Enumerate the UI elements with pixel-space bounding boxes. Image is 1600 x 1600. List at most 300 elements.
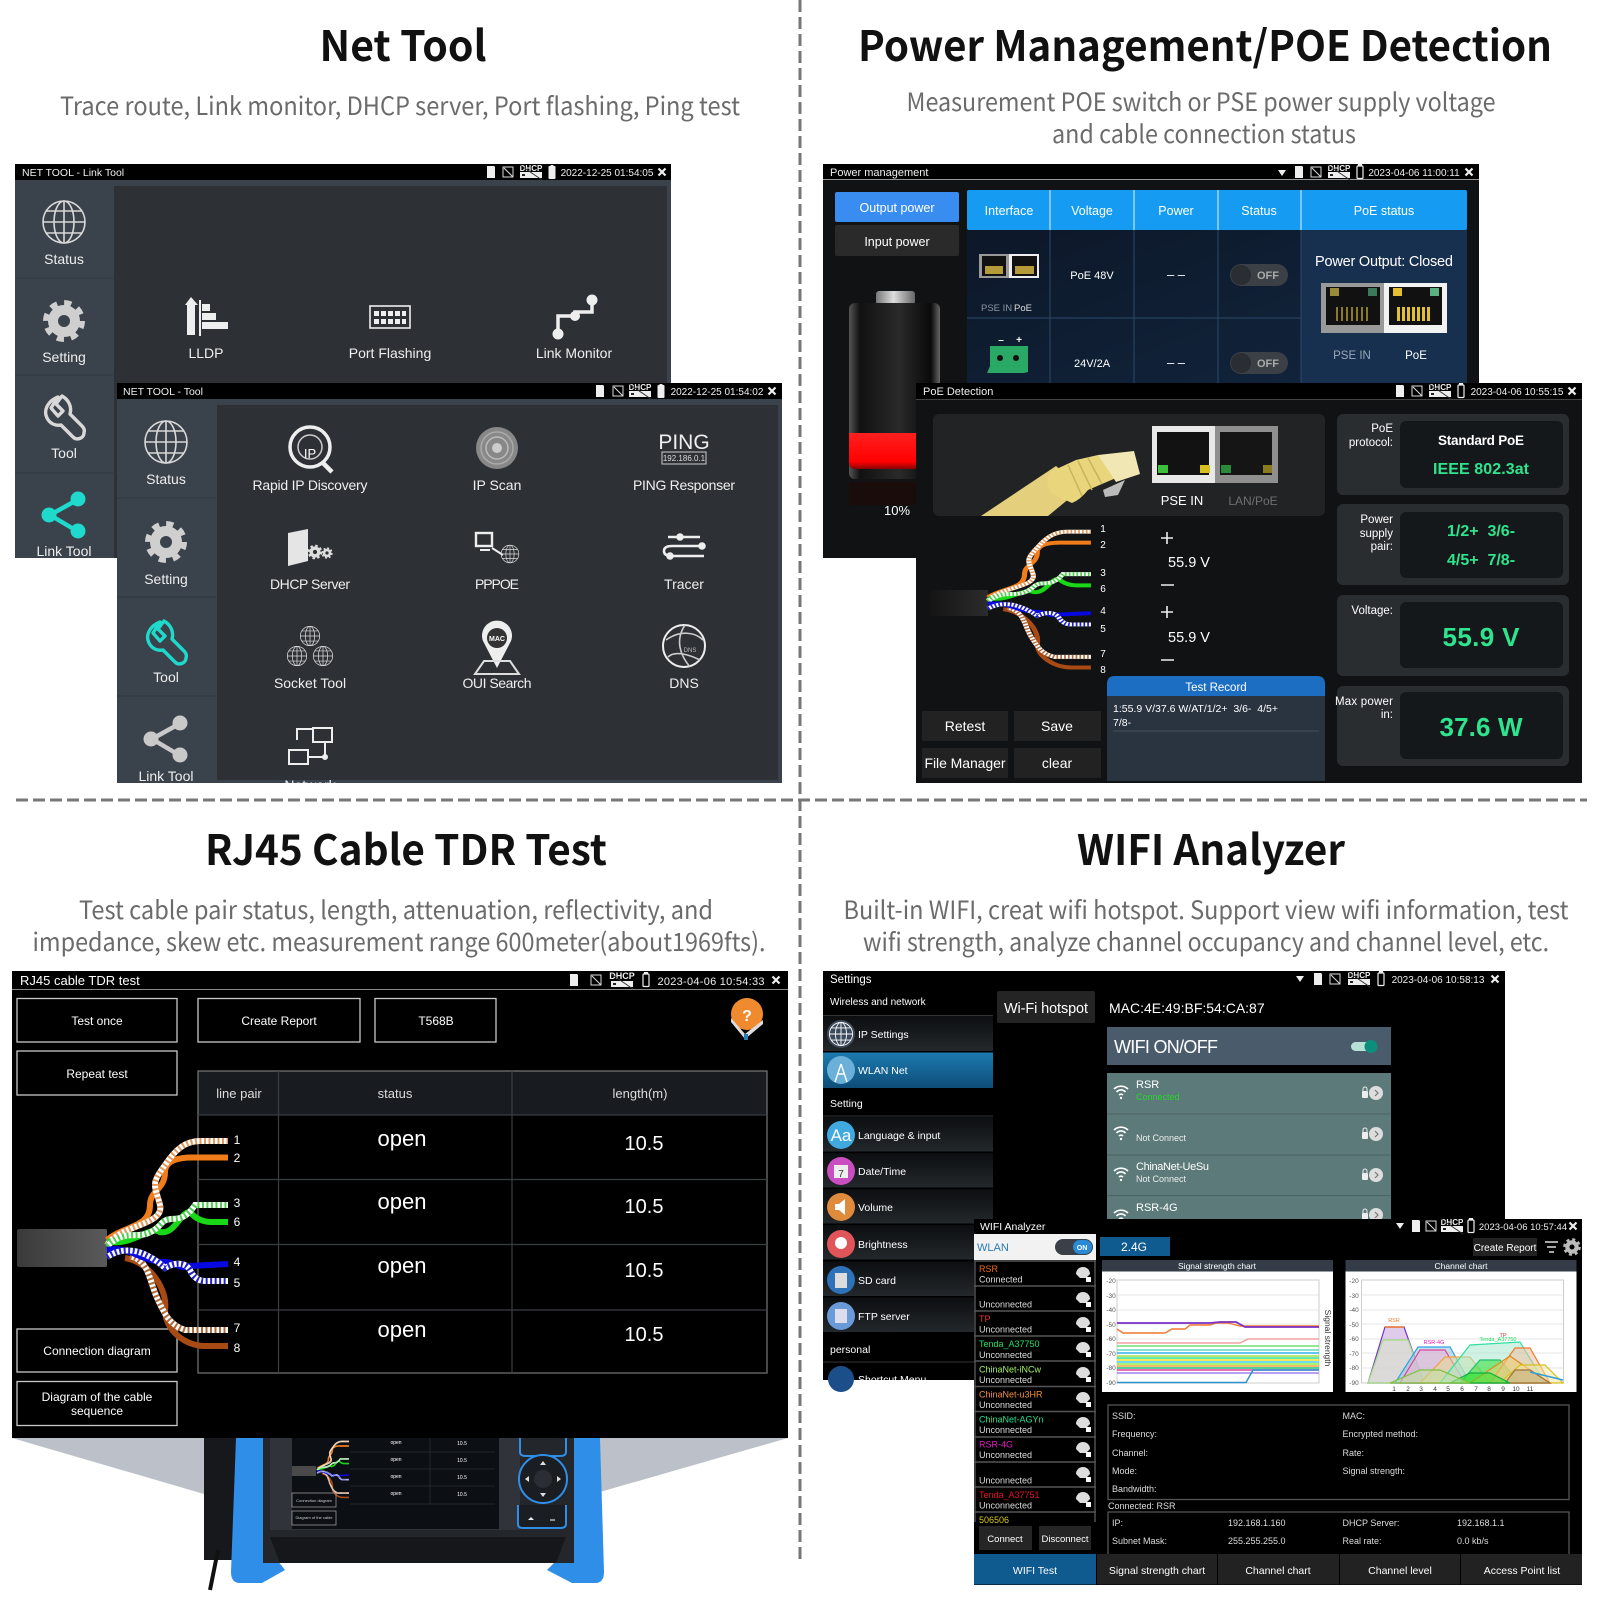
subtitle: WIFI Analyzer: Built-in WIFI, creat wifi hotspot. Support view wifi information, test	[844, 891, 1569, 927]
icon: Socket Tool: Socket Tool	[274, 675, 346, 691]
subtitle: RJ45 Cable TDR Test	[32, 891, 766, 959]
info box: connected network: 255.255.255.0	[1228, 1536, 1286, 1546]
info box: connected network: IP:	[1112, 1518, 1123, 1528]
menu: Date/Time: Date/Time	[858, 1166, 906, 1178]
icon: PING Responser	[633, 431, 735, 493]
chart: Channel: 9	[1501, 1386, 1505, 1393]
panel: NET TOOL Link Tool screen: NET TOOL - Link Tool	[22, 167, 124, 179]
settings menu: personal	[830, 1344, 870, 1356]
bottom tabs: Signal strength chart	[1109, 1565, 1205, 1577]
wifi access point list: Unconnected	[979, 1425, 1032, 1435]
wifi access point list: Connected	[979, 1274, 1023, 1284]
panel: Power management screen: Power management	[830, 167, 928, 179]
icon: PING Responser: 192.186.0.1	[663, 454, 706, 463]
sidebar: Setting	[42, 303, 86, 365]
label cut off at panel bottom: Network	[284, 777, 337, 793]
sidebar: Status	[43, 201, 85, 267]
readout: Voltage	[1337, 595, 1569, 676]
readout: PoE protocol: protocol:	[1349, 437, 1393, 449]
voltage readings per pair: 55.9 V	[1168, 630, 1210, 646]
info box: connected network: Subnet Mask:	[1112, 1536, 1167, 1546]
menu: Shortcut Menu	[828, 1366, 926, 1392]
icon: OUI Search: MAC	[489, 636, 505, 643]
bar: WIFI ON/OFF: WIFI ON/OFF	[1114, 1037, 1218, 1057]
MAC address: MAC:4E:49:BF:54:CA:87	[1109, 1000, 1265, 1016]
icon: help book	[731, 998, 763, 1040]
icon: Port Flashing	[349, 306, 431, 361]
buttons: Retest Save File Manager clear: Retest	[945, 718, 985, 734]
subtitle: Power Management	[906, 83, 1496, 151]
table: power interfaces: Power	[1158, 204, 1194, 218]
icon: DNS: DNS	[684, 648, 696, 654]
bar: WLAN switch	[974, 1234, 1096, 1260]
chart: Channel: RSR	[1388, 1318, 1400, 1324]
chart: Channel: -30	[1349, 1293, 1359, 1300]
diagram: PoE wires: 8	[1100, 665, 1106, 676]
icon: large RJ45 ports	[1321, 283, 1447, 333]
menu: Date/Time	[827, 1157, 906, 1185]
diagram: PoE wires: 5	[1100, 624, 1106, 635]
wifi network list	[1107, 1073, 1391, 1223]
settings menu: Setting	[830, 1098, 863, 1110]
buttons: Create Report	[241, 1014, 317, 1028]
status bar: 2023-04-06 10:55:15	[1471, 387, 1564, 398]
panel: Test Record: Test Record	[1185, 682, 1247, 694]
panel: WIFI Analyzer screen: WIFI Analyzer	[980, 1221, 1046, 1233]
table: power interfaces: Status	[1241, 204, 1277, 218]
button: 2.4G	[1100, 1237, 1170, 1256]
menu: WLAN Net	[827, 1056, 908, 1084]
chart: Channel: Channel chart	[1435, 1261, 1488, 1271]
chart: Channel	[1346, 1260, 1576, 1393]
info box: selected network: Frequency:	[1112, 1429, 1157, 1439]
panel: Settings WLAN screen: Settings	[830, 974, 872, 986]
chart: Channel: 2	[1406, 1386, 1410, 1393]
diagram: cable wires: 7	[234, 1321, 241, 1335]
menu: Date/Time: 7	[838, 1169, 844, 1180]
info box: connected network: 192.168.1.160	[1228, 1518, 1286, 1528]
bar: WLAN switch: WLAN	[977, 1242, 1009, 1254]
buttons: Retest Save File Manager clear: Save	[1041, 718, 1073, 734]
chart: Channel: 1	[1392, 1386, 1396, 1393]
chart: Channel: 8	[1487, 1386, 1491, 1393]
table: power interfaces: PoE	[1014, 303, 1032, 314]
table: power interfaces: Interface	[985, 204, 1033, 218]
readout: Power supply pair: pair:	[1371, 541, 1393, 553]
diagram: PoE wires: 4	[1100, 606, 1106, 617]
status bar: DHCP	[609, 971, 635, 981]
panel: Test Record	[1107, 676, 1325, 781]
info box: selected network: Bandwidth:	[1112, 1484, 1157, 1494]
subtitle: WIFI Analyzer: wifi strength, analyze channel occupancy and channel level, etc.	[863, 923, 1549, 959]
info box: selected network: Rate:	[1342, 1448, 1364, 1458]
sidebar: Tool: Tool	[153, 669, 179, 685]
table: TDR results: open	[378, 1317, 426, 1342]
chart: Channel: Tenda_A37750	[1479, 1337, 1517, 1343]
buttons: Connection diagram	[43, 1344, 151, 1358]
sidebar: Link Tool	[36, 492, 92, 559]
diagram: PoE wires: 6	[1100, 584, 1106, 595]
chart: Channel: -60	[1349, 1336, 1359, 1343]
wifi network list: Not Connect	[1136, 1133, 1187, 1143]
wifi network list: Not Connect	[1136, 1174, 1187, 1184]
chart: Signal strength: Signal strength	[1323, 1310, 1333, 1367]
panel: NET TOOL Tool screen	[117, 383, 782, 793]
buttons: Connect Disconnect: Disconnect	[1042, 1534, 1089, 1545]
menu: Shortcut Menu: Shortcut Menu	[858, 1374, 926, 1386]
info box: connected network: 0.0 kb/s	[1457, 1536, 1489, 1546]
panel: NET TOOL Tool screen: NET TOOL - Tool	[123, 386, 203, 398]
bottom tabs: Channel level	[1368, 1565, 1432, 1577]
wifi access point list: Unconnected	[979, 1325, 1032, 1335]
menu: Language and input: Aa	[831, 1126, 852, 1145]
icon: OUI Search: OUI Search	[462, 675, 532, 691]
mini screen content: 10.5	[457, 1441, 467, 1447]
voltage readings per pair: 55.9 V	[1168, 555, 1210, 571]
menu: Volume	[827, 1193, 893, 1221]
bottom tabs: Access Point list	[1484, 1565, 1560, 1577]
icon: DHCP Server	[270, 529, 350, 592]
icon: Rapid IP Discovery	[252, 427, 368, 493]
tester device photo	[12, 1438, 788, 1590]
mini screen content: 10.5	[457, 1458, 467, 1464]
wifi network list: Connected	[1136, 1092, 1180, 1102]
chart: Channel: -70	[1349, 1351, 1359, 1358]
status bar: 2023-04-06 11:00:11	[1368, 168, 1460, 179]
info box: selected network: Channel:	[1112, 1448, 1148, 1458]
diagram: PoE wires: 1	[1100, 524, 1106, 535]
icon: IP Scan: IP Scan	[473, 477, 521, 493]
status bar: DHCP	[1348, 971, 1371, 980]
readout: Max power in: Max power	[1335, 696, 1393, 708]
icon: LLDP: LLDP	[188, 345, 224, 361]
readout: Power supply pair: 4/5+ 7/8-	[1447, 552, 1515, 569]
wifi access point list: Tenda_A37751	[979, 1490, 1040, 1500]
diagram: PoE wires: 3	[1100, 568, 1106, 579]
icon: settings gear	[1564, 1239, 1580, 1255]
icon: Tracer: Tracer	[664, 576, 704, 592]
wifi access point list: Unconnected	[979, 1500, 1032, 1510]
wifi access point list: Unconnected	[979, 1475, 1032, 1485]
table: TDR results	[198, 1071, 767, 1373]
panel: Test Record: 7/8-	[1113, 717, 1132, 729]
title: Power Management/POE Detection: Power Management/POE Detection	[858, 13, 1552, 74]
icon: IP Scan	[473, 427, 521, 493]
illustration: cable and PSE ports: PSE IN	[1161, 493, 1203, 508]
subtitle: Net Tool: Trace route, Link monitor, DHCP server, Port flashing, Ping test	[60, 87, 741, 123]
table: TDR results: open	[378, 1189, 426, 1214]
white mask below panel	[100, 783, 790, 797]
panel: RJ45 cable TDR test screen: RJ45 cable TDR test	[20, 973, 140, 988]
status bar	[1396, 383, 1576, 399]
subtitle: Power Management: and cable connection status	[1052, 115, 1356, 151]
readout: PoE protocol: PoE	[1371, 423, 1393, 435]
readout: PoE protocol	[1337, 414, 1569, 495]
icon: LLDP	[185, 297, 228, 361]
wifi access point list: TP	[979, 1314, 991, 1324]
toggle: OFF	[1230, 352, 1288, 374]
readout: Power supply pair: supply	[1360, 528, 1393, 540]
bar: WIFI ON/OFF	[1107, 1027, 1391, 1065]
wifi access point list: Unconnected	[979, 1375, 1032, 1385]
wifi access point list: Tenda_A37750	[979, 1339, 1040, 1349]
settings menu: Wireless and network	[830, 997, 927, 1008]
info box: selected network: SSID:	[1112, 1411, 1136, 1421]
readout: Voltage: Voltage:	[1351, 605, 1393, 617]
icon: DHCP Server: DHCP Server	[270, 576, 350, 592]
subtitle: RJ45 Cable TDR Test: impedance, skew etc. measurement range 600meter(about1969fts).	[32, 923, 766, 959]
table: power interfaces: PSE IN	[981, 303, 1012, 314]
wifi access point list: Unconnected	[979, 1350, 1032, 1360]
button: Create Report	[1473, 1238, 1537, 1256]
chart: Channel: 7	[1474, 1386, 1478, 1393]
status bar: 2023-04-06 10:54:33	[658, 976, 764, 988]
icon: small RJ45 ports	[979, 254, 1039, 278]
icon: Rapid IP Discovery: Rapid IP Discovery	[252, 477, 368, 493]
wifi access point list: ChinaNet-iNCw	[979, 1364, 1042, 1374]
chart: Channel: -80	[1349, 1365, 1359, 1372]
readout: Max power in: in:	[1381, 709, 1393, 721]
wifi access point list: Unconnected	[979, 1400, 1032, 1410]
wifi access point list: ChinaNet-u3HR	[979, 1390, 1043, 1400]
button: Output power: Output power	[859, 201, 935, 215]
readout: Voltage: 55.9 V	[1442, 622, 1520, 652]
status bar: DHCP	[629, 383, 652, 392]
icon: Socket Tool	[274, 626, 346, 691]
tab: Wi-Fi hotspot	[997, 991, 1095, 1023]
icon: Link Monitor: Link Monitor	[536, 345, 612, 361]
table: power interfaces: – –	[1167, 355, 1186, 370]
chart: Channel: RSR-4G	[1424, 1340, 1444, 1346]
buttons: Diagram of the cable	[42, 1390, 153, 1404]
chart: Signal strength: -60	[1106, 1336, 1116, 1343]
status bar	[1296, 971, 1498, 987]
table: TDR results: line pair	[216, 1086, 262, 1101]
title: WIFI Analyzer: WIFI Analyzer	[1077, 817, 1346, 878]
mini screen content	[292, 1438, 495, 1525]
icon: PPPOE: PPPOE	[475, 576, 519, 592]
status bar: 2023-04-06 10:57:44	[1479, 1222, 1567, 1233]
wifi access point list: 506506	[979, 1515, 1009, 1525]
icon: help book: ?	[742, 1008, 752, 1025]
menu: FTP server: FTP server	[858, 1311, 910, 1323]
info box: selected network	[1108, 1405, 1569, 1500]
chart: Channel: 10	[1512, 1386, 1520, 1393]
icon: green terminal connector: –	[998, 335, 1004, 346]
mini screen content: open	[390, 1491, 402, 1497]
info box: selected network: Signal strength:	[1342, 1466, 1405, 1476]
diagram: cable wires: 1	[234, 1133, 241, 1147]
chart: Channel: -20	[1349, 1278, 1359, 1285]
status bar	[596, 383, 776, 399]
wifi access point list: Unconnected	[979, 1450, 1032, 1460]
info box: connected network: 192.168.1.1	[1457, 1518, 1505, 1528]
mini screen content: Diagram of the cable	[296, 1515, 333, 1520]
chart: Signal strength: -20	[1106, 1278, 1116, 1285]
chart: Signal strength: -70	[1106, 1351, 1116, 1358]
diagram: cable wires: 5	[234, 1276, 241, 1290]
status bar: 2023-04-06 10:58:13	[1392, 975, 1485, 986]
diagram: cable wires: 4	[234, 1255, 241, 1269]
sidebar: Setting: Setting	[144, 571, 188, 587]
info box: selected network: MAC:	[1342, 1411, 1365, 1421]
wifi access point list: RSR-4G	[979, 1440, 1013, 1450]
buttons: Retest Save File Manager clear: File Manager	[924, 755, 1006, 771]
chart: Channel: 6	[1460, 1386, 1464, 1393]
readout: Power supply pair: Power	[1360, 514, 1393, 526]
wifi network list: RSR	[1136, 1079, 1159, 1091]
info box: connected network: DHCP Server:	[1342, 1518, 1399, 1528]
dashed divider: horizontal	[16, 798, 1587, 802]
icon: filter	[1545, 1242, 1558, 1252]
panel: PoE Detection screen: PoE Detection	[923, 386, 993, 398]
wifi network list: RSR-4G	[1136, 1202, 1178, 1214]
readout: PoE protocol: Standard PoE	[1438, 433, 1524, 448]
readout: Max power in	[1335, 686, 1569, 766]
table: power interfaces	[967, 190, 1467, 390]
sidebar: Tool: Tool	[51, 445, 77, 461]
table: TDR results: 10.5	[625, 1196, 663, 1218]
buttons: Retest Save File Manager clear: clear	[1042, 755, 1073, 771]
buttons	[17, 998, 496, 1426]
chart: Signal strength: -30	[1106, 1293, 1116, 1300]
wifi access point list: Unconnected	[979, 1300, 1032, 1310]
icon: green terminal connector: +	[1016, 335, 1022, 346]
info box: connected network	[1108, 1501, 1569, 1554]
chart: Signal strength: -80	[1106, 1365, 1116, 1372]
settings menu	[823, 997, 993, 1392]
diagram: PoE wires	[930, 524, 1106, 676]
icon: Tracer	[664, 534, 704, 592]
table: TDR results: status	[378, 1086, 413, 1101]
info box: selected network: Encrypted method:	[1342, 1429, 1418, 1439]
icon: PING Responser: PING	[658, 431, 710, 454]
icon: OUI Search	[462, 621, 532, 691]
status bar	[487, 164, 666, 180]
title: Net Tool: Net Tool	[320, 13, 486, 74]
icon: Port Flashing: Port Flashing	[349, 345, 431, 361]
status bar: DHCP	[1441, 1218, 1464, 1227]
chart: Channel: -90	[1349, 1380, 1359, 1387]
diagram: cable wires: 6	[234, 1215, 241, 1229]
mini screen content: 10.5	[457, 1492, 467, 1498]
buttons: sequence	[71, 1404, 123, 1418]
subtitle: RJ45 Cable TDR Test: Test cable pair status, length, attenuation, reflectivity, and	[79, 891, 713, 927]
chart: Channel: TP	[1499, 1333, 1507, 1339]
menu: SD card	[827, 1266, 896, 1294]
table: power interfaces: – –	[1167, 267, 1186, 282]
diagram: cable wires: 2	[234, 1151, 241, 1165]
icon: green terminal connector	[987, 335, 1028, 373]
bottom tabs: Channel chart	[1245, 1565, 1311, 1577]
sidebar: Tool	[46, 396, 84, 461]
toggle: OFF: OFF	[1257, 358, 1279, 370]
table: power interfaces: Power Output: Closed	[1315, 254, 1453, 270]
status bar: 2022-12-25 01:54:05	[561, 168, 654, 179]
menu: Language and input	[827, 1121, 940, 1149]
keypad	[518, 1438, 567, 1528]
sidebar: Tool	[148, 621, 186, 685]
panel: RJ45 cable TDR test screen	[12, 971, 788, 1438]
chart: Channel: -40	[1349, 1307, 1359, 1314]
table: TDR results: open	[378, 1253, 426, 1278]
mini screen content: Connection diagram	[296, 1498, 333, 1503]
icon: Rapid IP Discovery: IP	[304, 446, 316, 461]
table: TDR results: 10.5	[625, 1133, 663, 1155]
bottom tabs	[974, 1554, 1582, 1584]
panel: NET TOOL Link Tool screen	[15, 164, 671, 559]
panel: WIFI Analyzer screen	[974, 1218, 1582, 1585]
illustration: cable and PSE ports: LAN/PoE	[1228, 494, 1278, 508]
readout: Power supply pair	[1337, 504, 1569, 585]
chart: Channel: 4	[1433, 1386, 1437, 1393]
menu: IP Settings: IP Settings	[858, 1029, 909, 1041]
sidebar: Link Tool	[138, 716, 194, 784]
toggle: OFF	[1230, 264, 1288, 286]
diagram: PoE wires: 2	[1100, 540, 1106, 551]
chart: Signal strength: Signal strength chart	[1178, 1261, 1257, 1271]
buttons: Connect Disconnect: Connect	[987, 1534, 1023, 1545]
wifi access point list	[974, 1261, 1096, 1525]
wifi network list: ChinaNet-UeSu	[1136, 1161, 1209, 1173]
diagram: cable wires	[17, 1133, 241, 1355]
diagram: cable wires: 3	[234, 1196, 241, 1210]
wifi access point list: RSR	[979, 1264, 999, 1274]
sidebar: Setting: Setting	[42, 349, 86, 365]
button: 2.4G: 2.4G	[1121, 1240, 1147, 1254]
chart: Channel: -50	[1349, 1322, 1359, 1329]
chart: Channel: 3	[1419, 1386, 1423, 1393]
table: power interfaces: PoE	[1405, 350, 1427, 362]
subtitle: Power Management: Measurement POE switch or PSE power supply voltage	[906, 83, 1496, 119]
buttons: Connect Disconnect	[974, 1523, 1096, 1554]
menu: IP Settings	[827, 1020, 909, 1048]
icon: DNS: DNS	[669, 675, 699, 691]
subtitle: WIFI Analyzer	[844, 891, 1569, 959]
tab: Wi-Fi hotspot: Wi-Fi hotspot	[1004, 1001, 1088, 1017]
sidebar: Link Tool: Link Tool	[138, 768, 194, 784]
readout: PoE protocol: IEEE 802.3at	[1433, 461, 1530, 478]
table: power interfaces: PoE 48V	[1070, 270, 1114, 282]
status bar: DHCP	[1328, 164, 1351, 173]
mini screen content: open	[390, 1440, 402, 1446]
panel: Settings WLAN screen	[823, 971, 1505, 1392]
buttons: Repeat test	[66, 1067, 128, 1081]
table: power interfaces: PSE IN	[1333, 350, 1371, 362]
sidebar: Status	[145, 421, 187, 487]
wifi access point list: ChinaNet-AGYn	[979, 1415, 1044, 1425]
sidebar: Status: Status	[44, 251, 84, 267]
table: power interfaces: PoE status	[1354, 204, 1414, 218]
table: TDR results: open	[378, 1126, 426, 1151]
icon: network tool	[289, 728, 332, 764]
title: RJ45 Cable TDR Test: RJ45 Cable TDR Test	[205, 817, 607, 878]
info box: selected network: Mode:	[1112, 1466, 1137, 1476]
icon: DNS	[663, 625, 705, 691]
mini screen content: 10.5	[457, 1475, 467, 1481]
status bar	[570, 971, 780, 989]
readout: Max power in: 37.6 W	[1440, 712, 1523, 742]
panel: Power management screen	[823, 164, 1479, 558]
chart: Signal strength: -90	[1106, 1380, 1116, 1387]
buttons: Retest Save File Manager clear	[922, 711, 1101, 778]
table: TDR results: length(m)	[613, 1086, 667, 1101]
illustration: cable and PSE ports	[933, 414, 1325, 516]
voltage readings per pair	[1161, 532, 1210, 660]
menu: Language and input: Language & input	[858, 1130, 940, 1142]
readout: Power supply pair: 1/2+ 3/6-	[1447, 523, 1515, 540]
diagram: PoE wires: 7	[1100, 649, 1106, 660]
